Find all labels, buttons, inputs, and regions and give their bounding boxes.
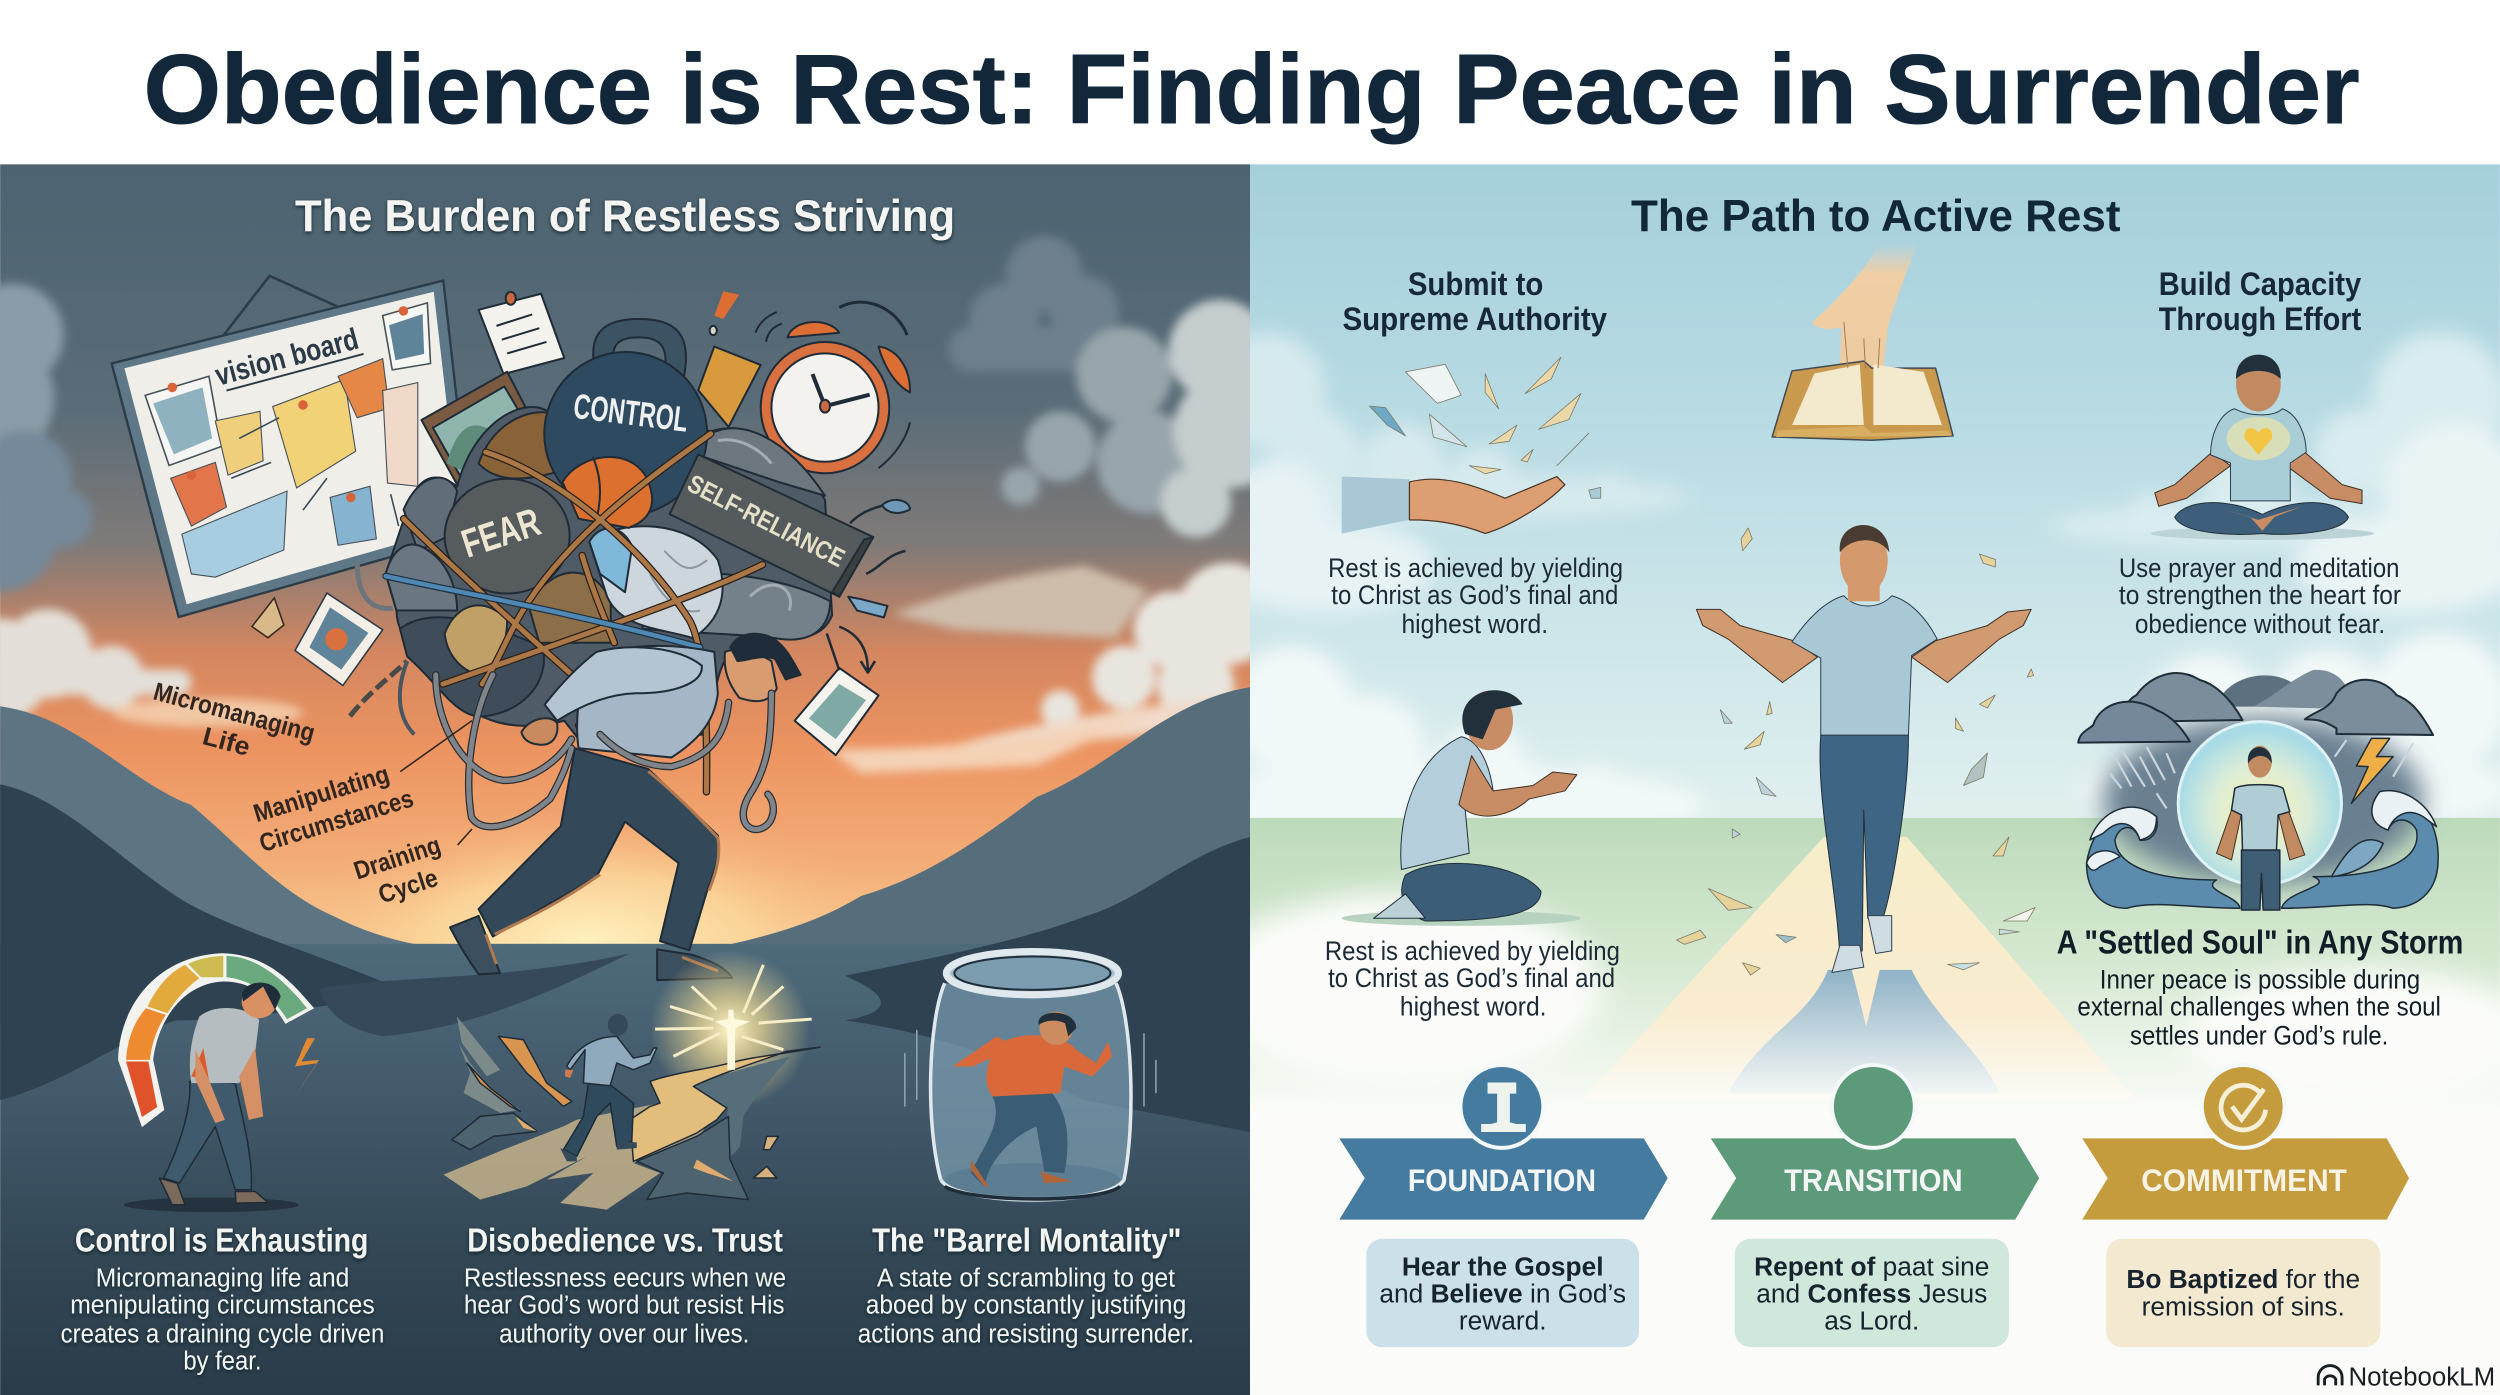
label: manipulating circumstances: Circumstances [256, 785, 417, 858]
hook [357, 562, 393, 608]
icon: open hand releasing papers [1342, 357, 1601, 533]
right sky background [1250, 164, 2500, 834]
kettlebell body [544, 352, 707, 516]
panel: the burden of restless striving [0, 164, 1288, 1395]
cloth bundle [589, 526, 723, 638]
text: disobedience vs trust: hear God’s word but resist His [464, 1290, 784, 1320]
orange ball [563, 457, 652, 528]
falling photo and shard [252, 593, 383, 686]
icon: check badge [2202, 1065, 2285, 1148]
icon: pillar [1460, 1065, 1543, 1148]
floating petals [1676, 528, 2035, 975]
text: use prayer: to strengthen the heart for [2119, 579, 2401, 610]
text: settled soul: settles under God’s rule. [2130, 1019, 2388, 1050]
text: rest is achieved, lower: highest word. [1400, 991, 1547, 1022]
commitment step [2082, 1065, 2409, 1347]
left sky background [0, 164, 1250, 993]
path [1582, 837, 2136, 1100]
text: barrel mentality: The "Barrel Montality" [872, 1223, 1181, 1260]
card: be baptized: remission of sins. [2142, 1291, 2345, 1321]
text: use prayer [2119, 552, 2401, 639]
icon: kneeling man praying [1342, 690, 1581, 926]
section heading right: The Path to Active Rest [1631, 192, 2121, 241]
card: be baptized: Bo Baptized for the [2126, 1264, 2360, 1294]
label: manipulating circumstances [247, 756, 417, 858]
notebooklm logo: NotebookLM [2348, 1363, 2495, 1391]
panel: the path to active rest [1164, 164, 2500, 1395]
text: barrel mentality: aboed by constantly justifying [866, 1290, 1186, 1320]
foundation step: FOUNDATION [1408, 1162, 1596, 1198]
walker shadow [1728, 970, 1999, 1093]
card: hear the gospel: and Believe in God’s [1379, 1279, 1626, 1309]
heading: submit to supreme authority [1342, 265, 1607, 337]
board label: vision board [212, 323, 362, 393]
card: repent [1735, 1239, 2009, 1347]
grass wash behind text [1204, 893, 2500, 1103]
text: settled soul: external challenges when the soul [2077, 991, 2441, 1022]
heading: build capacity: Build Capacity [2159, 265, 2361, 302]
gray rope loops [436, 675, 773, 829]
text: disobedience vs trust [464, 1223, 786, 1348]
sun glow at horizon [404, 834, 776, 944]
card: repent: and Confess Jesus [1756, 1279, 1987, 1309]
header band [0, 0, 2500, 166]
text: disobedience vs trust: authority over our lives. [499, 1318, 749, 1348]
sky clouds [0, 236, 1288, 773]
man: shoes [450, 916, 500, 974]
burden pile and man [350, 291, 910, 980]
fear ball [445, 479, 570, 594]
text: control is exhausting: creates a draining cycle driven [61, 1318, 384, 1348]
dark ridges [0, 784, 1250, 1132]
text: control is exhausting: by fear. [183, 1345, 262, 1375]
load labels: CONTROL [571, 387, 690, 440]
text: rest is achieved, lower [1325, 935, 1620, 1022]
transition step [1711, 1065, 2039, 1347]
callout labels around the man [143, 678, 472, 914]
chevron: foundation [1339, 1138, 1668, 1220]
text: use prayer: obedience without fear. [2135, 608, 2385, 639]
icon: person in bubble in storm [2078, 670, 2438, 910]
pinned note [479, 292, 564, 374]
label: manipulating circumstances: Manipulating [250, 760, 393, 828]
icon: green badge [1832, 1065, 1915, 1148]
mountains [0, 687, 1250, 1020]
label: micromanaging life: Micromanaging [150, 678, 318, 748]
text: rest is achieved, upper: to Christ as God’s final and [1331, 579, 1618, 610]
text: control is exhausting: Micromanaging life and [96, 1263, 349, 1293]
text: rest is achieved, lower: Rest is achieved by yielding [1325, 935, 1620, 966]
icon: meditating person [2151, 355, 2374, 540]
icon: walking man with open arms [1696, 525, 2031, 973]
label: micromanaging life: Life [200, 722, 253, 762]
label: draining cycle: Draining [351, 831, 444, 886]
grass [1250, 818, 2500, 1395]
label: draining cycle: Cycle [375, 864, 441, 909]
load labels: FEAR [456, 500, 546, 567]
text: rest is achieved, upper [1328, 552, 1623, 639]
text: settled soul [2057, 924, 2463, 1050]
card: hear the gospel: Hear the Gospel [1402, 1251, 1604, 1281]
load labels: SELF-RELIANCE [683, 470, 849, 573]
chain [350, 661, 407, 716]
alarm clock [755, 302, 910, 473]
text: disobedience vs trust: Restlessness eecurs when we [464, 1263, 786, 1293]
text: disobedience vs trust: Disobedience vs. Trust [467, 1223, 783, 1260]
figures traced on the right panel [1342, 243, 2374, 975]
text: barrel mentality: actions and resisting surrender. [858, 1318, 1194, 1348]
ropes [386, 434, 762, 792]
transition step: TRANSITION [1784, 1162, 1963, 1198]
text: control is exhausting: menipulating circumstances [70, 1290, 375, 1320]
text: control is exhausting: Control is Exhausting [75, 1223, 368, 1260]
card: be baptized [2106, 1239, 2380, 1347]
foundation step [1339, 1065, 1668, 1347]
text: barrel mentality [858, 1223, 1194, 1348]
card: hear the gospel [1366, 1239, 1639, 1347]
small debris and arrow [827, 500, 910, 673]
text: rest is achieved, lower: to Christ as God’s final and [1328, 962, 1615, 993]
heading: build capacity: Through Effort [2159, 300, 2361, 337]
label: draining cycle [351, 831, 454, 914]
heading: submit to supreme authority: Supreme Authority [1342, 300, 1607, 337]
card: hear the gospel: reward. [1459, 1306, 1547, 1336]
man: head [725, 650, 777, 701]
heading: submit to supreme authority: Submit to [1408, 265, 1543, 302]
icon: cross and broken path [443, 950, 820, 1210]
frame [421, 372, 529, 491]
kettlebell handle [593, 319, 686, 376]
ground [0, 944, 1250, 1395]
right clouds [1164, 332, 2500, 847]
text: use prayer: Use prayer and meditation [2119, 552, 2399, 583]
card: repent: as Lord. [1824, 1306, 1919, 1336]
commitment step: COMMITMENT [2141, 1162, 2347, 1198]
section heading left: The Burden of Restless Striving [295, 192, 955, 241]
text: rest is achieved, upper: highest word. [1401, 608, 1548, 639]
exclamation mark [710, 291, 739, 335]
icon: barrel with scrambling man [905, 952, 1156, 1202]
icon: exhausted man with gauge [118, 953, 319, 1212]
falling page [795, 668, 879, 755]
icon: hand on open book [1772, 243, 1953, 440]
text: barrel mentality: A state of scrambling to get [877, 1263, 1176, 1293]
text: rest is achieved, upper: Rest is achieved by yielding [1328, 552, 1623, 583]
title: Obedience is Rest: Finding Peace in Surrender [144, 34, 2360, 144]
text: control is exhausting [61, 1223, 384, 1375]
heading: build capacity [2159, 265, 2361, 337]
text: settled soul: Inner peace is possible during [2100, 963, 2420, 994]
man: torso and arm [577, 646, 718, 757]
orange card [698, 347, 761, 427]
man: pants [479, 748, 719, 950]
load labels [456, 387, 849, 573]
card: repent: Repent of paat sine [1754, 1251, 1989, 1281]
label: micromanaging life [143, 678, 318, 777]
self reliance box [670, 454, 873, 597]
chevron: transition [1711, 1138, 2039, 1220]
stone mass [386, 407, 832, 744]
vision board [112, 276, 472, 617]
chevron: commitment [2082, 1138, 2409, 1220]
